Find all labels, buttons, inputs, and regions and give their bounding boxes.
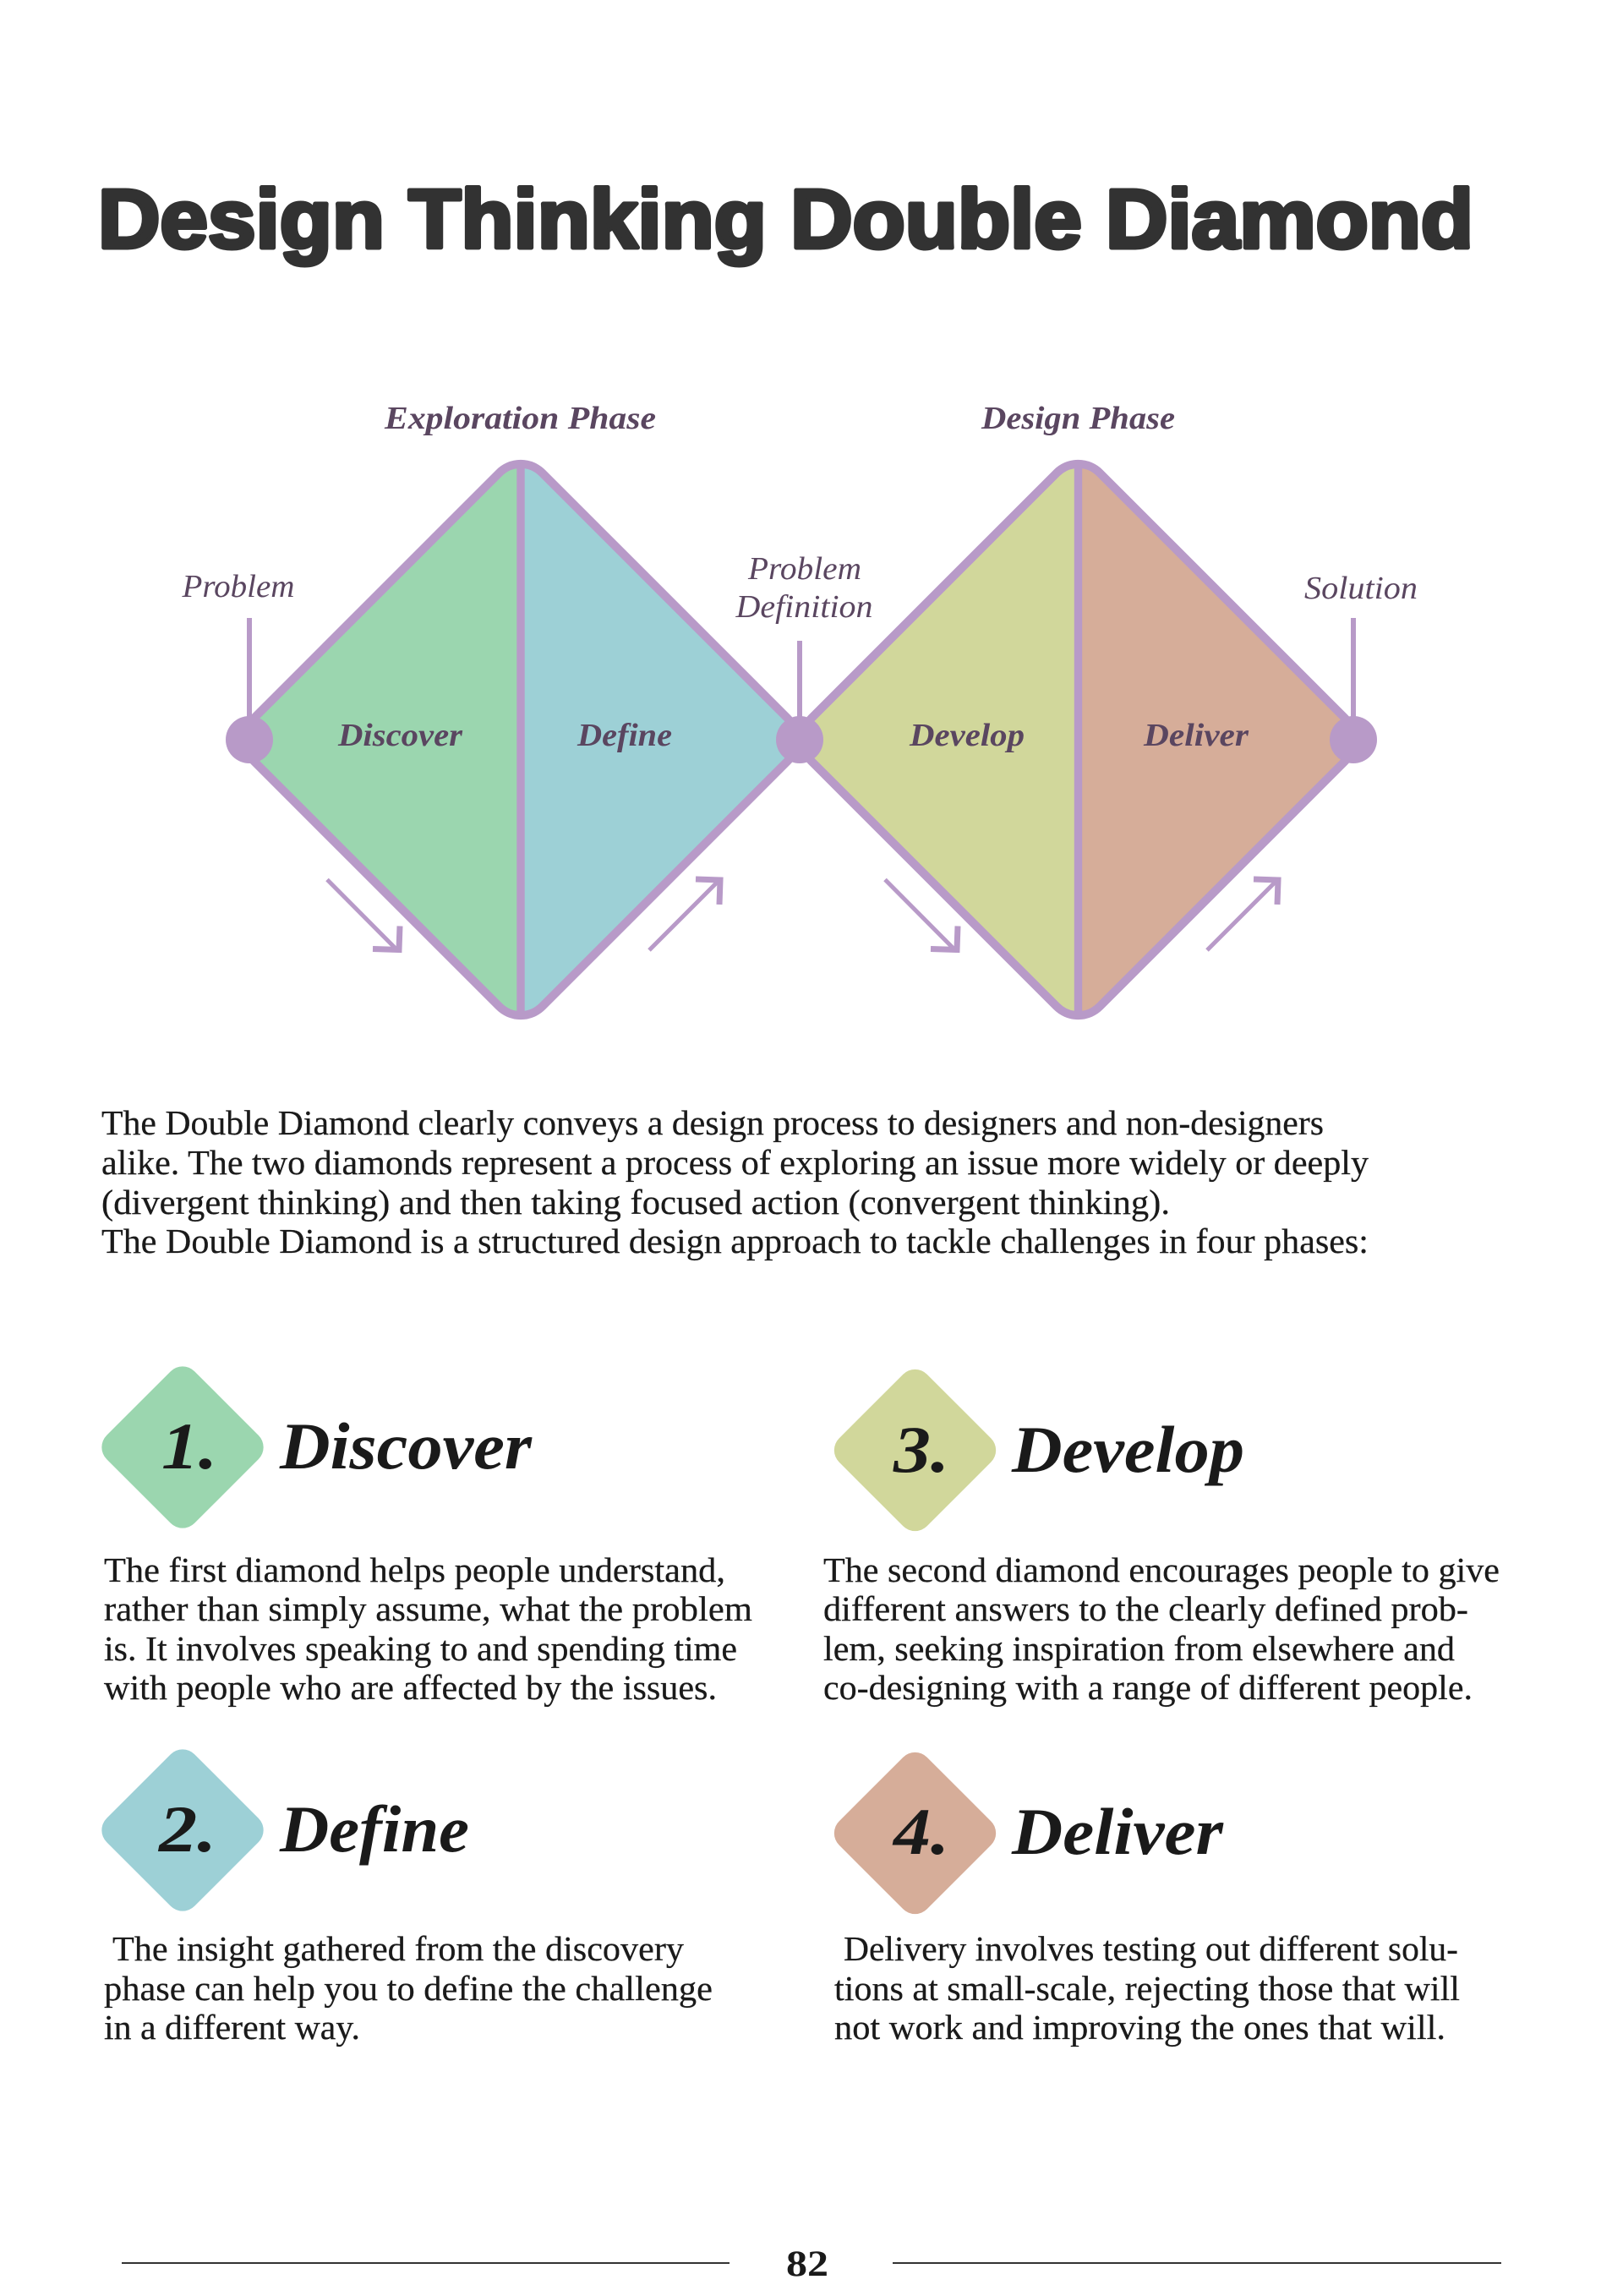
label: define: Define [577, 718, 672, 753]
footer with page number: 82 [786, 2244, 828, 2284]
arrow: converge 2 [1207, 879, 1278, 950]
description: The second diamond encourages people to give [823, 1550, 1500, 1589]
description: tions at small-scale, rejecting those that will [834, 1969, 1460, 2008]
description: different answers to the clearly defined prob- [823, 1589, 1468, 1628]
panel: 4 deliver [828, 1746, 1460, 2047]
label: problem definition [735, 551, 872, 625]
heading: Deliver [1011, 1795, 1224, 1868]
label: discover: Discover [337, 718, 463, 753]
intro text block: The Double Diamond clearly conveys a design process to designers and non-designers [101, 1103, 1324, 1142]
label: problem definition: Definition [735, 589, 872, 625]
description: not work and improving the ones that will. [834, 2008, 1445, 2047]
marker: solution [1330, 618, 1377, 763]
phase label: design: Design Phase [981, 401, 1175, 436]
description [104, 1550, 752, 1707]
description: rather than simply assume, what the problem [104, 1589, 752, 1628]
arrow: diverge 2 [885, 879, 958, 950]
description [823, 1550, 1500, 1707]
icon: salmon diamond [828, 1746, 1003, 1921]
phase label: exploration: Exploration Phase [384, 401, 656, 436]
heading: Develop [1011, 1413, 1244, 1486]
description [104, 1929, 713, 2047]
diamond: exploration [245, 464, 796, 1015]
description: Delivery involves testing out different solu- [844, 1929, 1458, 1968]
description: The first diamond helps people understand, [104, 1550, 725, 1589]
description: co-designing with a range of different people. [823, 1668, 1473, 1707]
icon: blue diamond [95, 1742, 270, 1918]
description: with people who are affected by the issues. [104, 1668, 717, 1707]
heading: Define [279, 1792, 469, 1866]
number 1: 1. [161, 1409, 217, 1483]
panel: 1 discover [95, 1359, 752, 1707]
label: develop: Develop [909, 718, 1025, 753]
label: solution: Solution [1304, 571, 1418, 606]
label: problem: Problem [181, 569, 294, 604]
icon: green diamond [95, 1359, 270, 1535]
description: The insight gathered from the discovery [112, 1929, 685, 1968]
icon: yellow-green diamond [828, 1363, 1003, 1538]
intro text block: (divergent thinking) and then taking focused action (convergent thinking). [101, 1183, 1170, 1222]
marker: problem definition [776, 641, 823, 763]
label: problem definition: Problem [747, 551, 861, 587]
intro text block [101, 1103, 1369, 1260]
number 2: 2. [158, 1792, 216, 1866]
description [834, 1929, 1460, 2047]
arrow: converge 1 [649, 879, 720, 950]
description: is. It involves speaking to and spending time [104, 1629, 737, 1668]
number 3: 3. [893, 1413, 949, 1486]
label: deliver: Deliver [1143, 718, 1249, 753]
description: lem, seeking inspiration from elsewhere and [823, 1629, 1455, 1668]
panel: 3 develop [823, 1363, 1500, 1707]
number 4: 4. [892, 1795, 949, 1868]
panel: double diamond diagram [181, 401, 1418, 1015]
description: phase can help you to define the challenge [104, 1969, 713, 2008]
description: in a different way. [104, 2008, 360, 2047]
arrow: diverge 1 [327, 879, 400, 950]
intro text block: The Double Diamond is a structured design approach to tackle challenges in four phases: [101, 1222, 1369, 1260]
panel: 2 define [95, 1742, 713, 2047]
intro text block: alike. The two diamonds represent a process of exploring an issue more widely or deeply [101, 1143, 1369, 1182]
marker: problem [226, 618, 273, 763]
diamond: design [802, 464, 1354, 1015]
title: Design Thinking Double Diamond [98, 172, 1473, 265]
heading: Discover [279, 1409, 533, 1483]
